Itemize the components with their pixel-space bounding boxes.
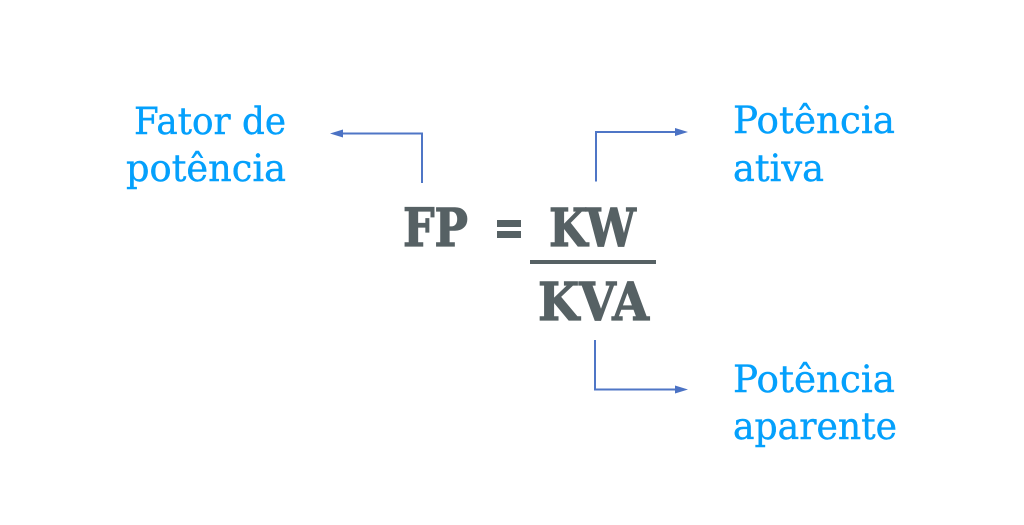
label: potência aparente [733, 358, 897, 448]
label: fator de potência: potência [126, 147, 286, 190]
label: potência ativa [733, 99, 895, 190]
fraction bar [530, 260, 656, 264]
label: potência ativa: Potência [733, 99, 895, 142]
arrow: to potência aparente [595, 340, 688, 394]
label: potência aparente: aparente [733, 405, 897, 448]
formula: FP = KW / KVA [403, 198, 656, 333]
label: fator de potência: Fator de [134, 100, 286, 143]
formula denominator: KVA: KVA [538, 272, 650, 333]
label: potência ativa: ativa [733, 147, 824, 190]
label: fator de potência [126, 100, 286, 190]
arrow: to fator de potência [330, 130, 422, 183]
arrow: to potência ativa [596, 128, 688, 182]
formula term: FP: FP [403, 198, 468, 259]
equals sign [497, 220, 521, 238]
formula numerator: KW: KW [549, 198, 637, 259]
label: potência aparente: Potência [733, 358, 895, 401]
